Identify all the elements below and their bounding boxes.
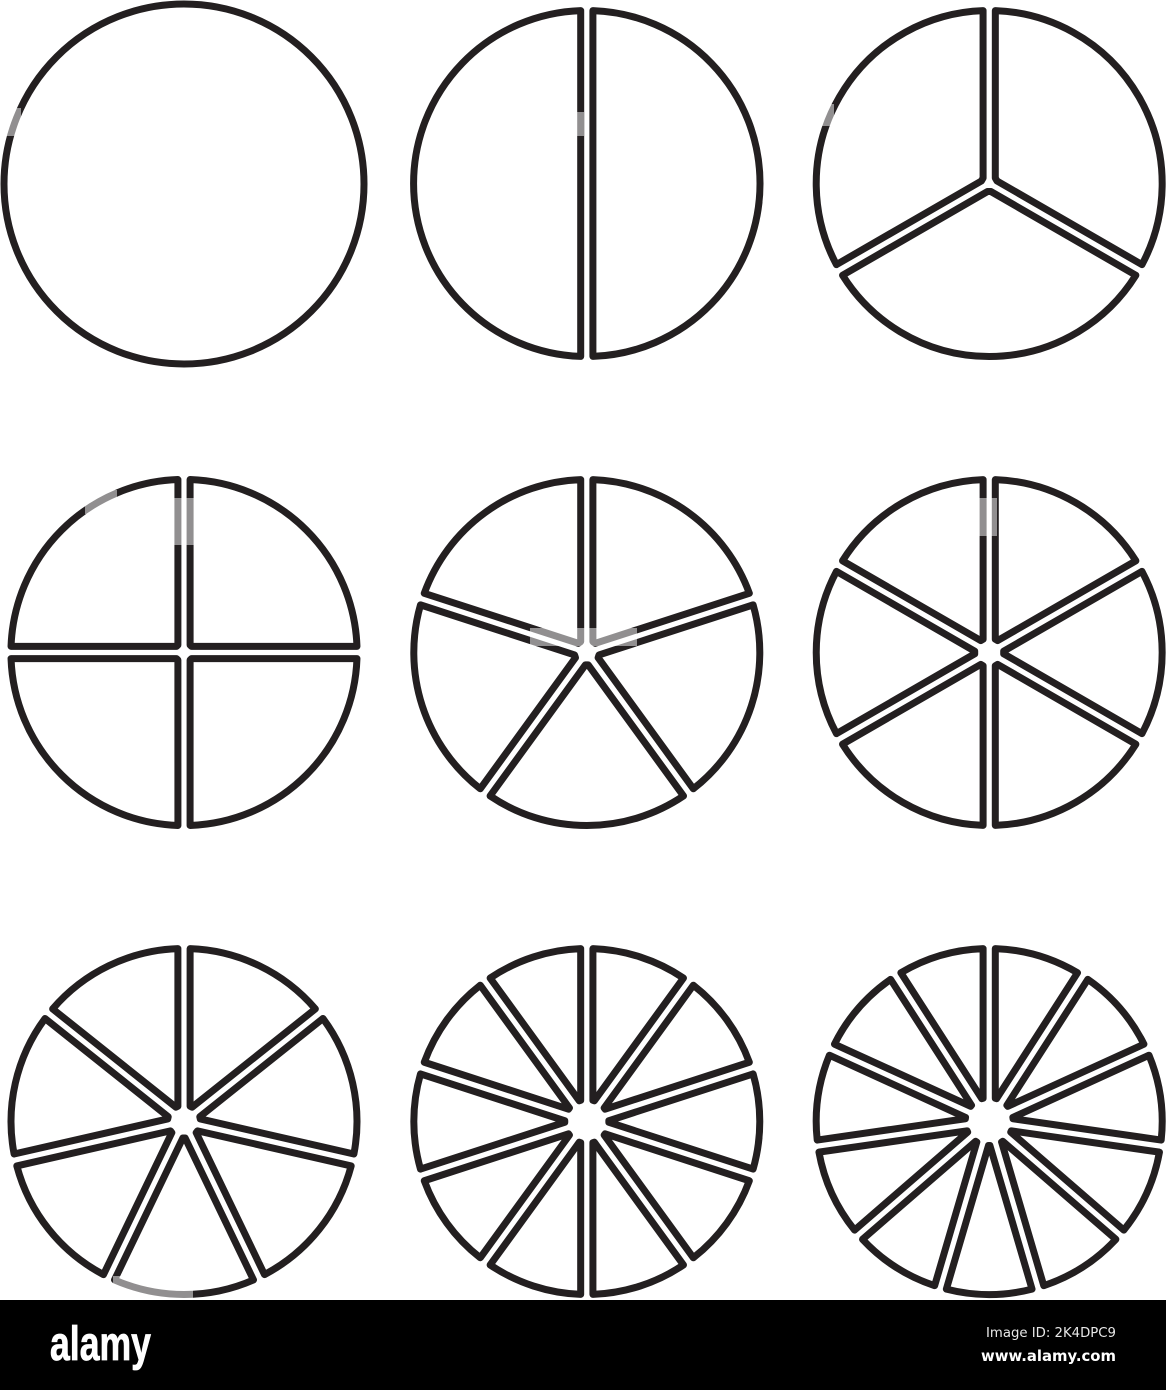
pie: 4 segments [0,447,390,858]
pie: 5 segments [392,456,781,825]
pie: 3 segments [766,0,1166,356]
image id: Image ID: 2K4DPC9 [986,1325,1116,1341]
pie: whole circle [4,4,364,364]
watermark traces on strokes [5,104,997,1300]
pie: 10 segments [414,942,760,1301]
website: www.alamy.com [981,1347,1116,1365]
pie: 7 segments [0,936,368,1294]
pie: 2 segments [414,11,760,356]
footer bar [0,1300,1166,1390]
pie: 6 segments [816,462,1162,843]
pie: 11 segments [812,943,1166,1294]
logo: alamy: alamy [50,1318,151,1371]
